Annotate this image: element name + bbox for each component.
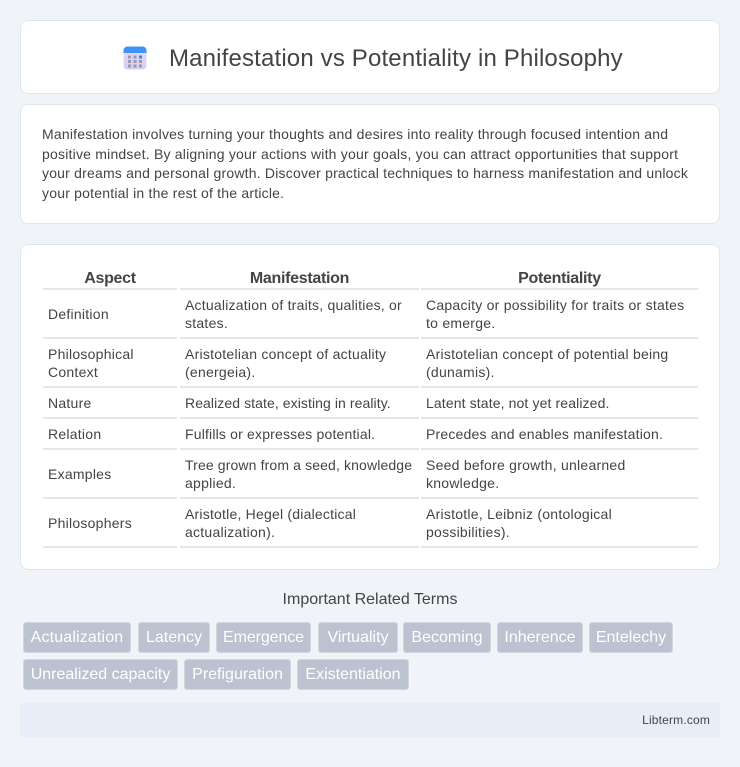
- row: definition: to emerge.: [426, 315, 495, 331]
- tags: related terms: Latency: [146, 629, 202, 646]
- heading: important related terms: Important Related Terms: [283, 591, 457, 608]
- row: philosophers: Aristotle, Leibniz (ontological: [426, 506, 612, 522]
- row: nature: [43, 395, 698, 419]
- footer credit: Libterm.com: [642, 713, 710, 727]
- tags: related terms: Actualization: [31, 629, 123, 646]
- row: definition: Actualization of traits, qualities, or: [185, 297, 402, 313]
- row: examples: knowledge.: [426, 475, 499, 491]
- row: philosophers: [43, 506, 698, 548]
- row: examples: applied.: [185, 475, 236, 491]
- panel: introduction: [20, 104, 720, 224]
- row: definition: Definition: [48, 306, 109, 322]
- row: philosophers: actualization).: [185, 524, 275, 540]
- row: philosophical context: Aristotelian concept of potential being: [426, 346, 668, 362]
- row: examples: [43, 457, 698, 499]
- row: relation: Fulfills or expresses potential.: [185, 426, 375, 442]
- icon: calendar: [124, 46, 146, 70]
- row: philosophical context: Aristotelian concept of actuality: [185, 346, 386, 362]
- intro text: [42, 126, 688, 201]
- row: nature: Nature: [48, 395, 92, 411]
- row: examples: Tree grown from a seed, knowledge: [185, 457, 412, 473]
- intro text: your dreams and personal growth. Discover practical techniques to harness manifestation and unlock: [42, 165, 688, 181]
- row: definition: Capacity or possibility for traits or states: [426, 297, 684, 313]
- row: relation: [43, 426, 698, 450]
- row: philosophical context: Philosophical: [48, 346, 134, 362]
- tags: related terms: Unrealized capacity: [31, 666, 170, 683]
- row: philosophical context: [43, 346, 698, 388]
- panel: header: [20, 20, 720, 94]
- table header: Aspect: [84, 270, 136, 287]
- row: philosophical context: (dunamis).: [426, 364, 495, 380]
- panel: comparison table: [20, 244, 720, 570]
- table header: Potentiality: [518, 270, 601, 287]
- row: philosophical context: Context: [48, 364, 98, 380]
- tags: related terms: Becoming: [411, 629, 483, 646]
- tags: related terms: [23, 622, 673, 690]
- row: philosophical context: (energeia).: [185, 364, 255, 380]
- intro text: Manifestation involves turning your thoughts and desires into reality through focused intention and: [42, 126, 668, 142]
- intro text: your potential in the rest of the article.: [42, 184, 284, 200]
- title: Manifestation vs Potentiality in Philosophy: [169, 45, 623, 72]
- intro text: positive mindset. By aligning your actions with your goals, you can attract opportunities that support: [42, 146, 678, 162]
- row: philosophers: Philosophers: [48, 515, 132, 531]
- row: relation: Relation: [48, 426, 101, 442]
- row: nature: Realized state, existing in reality.: [185, 395, 391, 411]
- row: philosophers: possibilities).: [426, 524, 510, 540]
- tags: related terms: Inherence: [504, 629, 576, 646]
- row: relation: Precedes and enables manifestation.: [426, 426, 663, 442]
- row: examples: Examples: [48, 466, 111, 482]
- tags: related terms: Entelechy: [596, 629, 666, 646]
- footer: [20, 703, 720, 737]
- table header: [43, 270, 698, 290]
- row: definition: states.: [185, 315, 228, 331]
- tags: related terms: Existentiation: [305, 666, 401, 683]
- tags: related terms: Virtuality: [327, 629, 389, 646]
- row: nature: Latent state, not yet realized.: [426, 395, 610, 411]
- row: examples: Seed before growth, unlearned: [426, 457, 626, 473]
- row: definition: [43, 297, 698, 339]
- row: philosophers: Aristotle, Hegel (dialectical: [185, 506, 356, 522]
- tags: related terms: Prefiguration: [192, 666, 283, 683]
- tags: related terms: Emergence: [223, 629, 304, 646]
- table header: Manifestation: [250, 270, 349, 287]
